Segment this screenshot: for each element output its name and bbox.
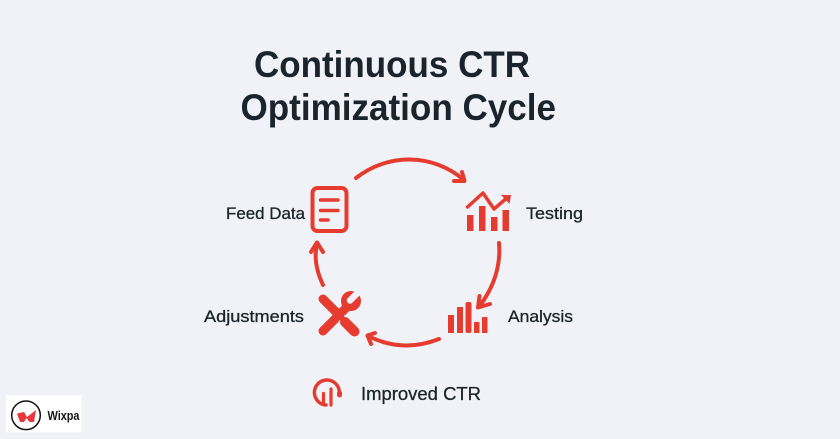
- logo: wixpa: [6, 395, 82, 432]
- label: analysis: Analysis: [508, 307, 573, 326]
- icon: wixpa mark: [12, 401, 40, 430]
- icon: document: [312, 188, 346, 231]
- step: adjustments: [204, 290, 361, 332]
- icon: crossed tools: [323, 290, 361, 332]
- label: improved ctr: Improved CTR: [361, 384, 481, 404]
- label: adjustments: Adjustments: [204, 307, 304, 326]
- step: testing: [467, 193, 583, 231]
- title: [240, 43, 556, 128]
- step: feed data: [226, 188, 346, 231]
- label: testing: Testing: [526, 204, 583, 223]
- arrow: feed data to testing: [356, 159, 464, 181]
- arrow: adjustments to feed data: [311, 242, 323, 285]
- result: improved ctr: [314, 380, 481, 405]
- title: Continuous CTR: [254, 43, 530, 85]
- arrow: testing to analysis: [478, 243, 499, 308]
- label: feed data: Feed Data: [226, 204, 306, 223]
- arrow: analysis to adjustments: [368, 333, 439, 345]
- text: wixpa: Wixpa: [48, 409, 80, 423]
- icon: bar chart: [448, 302, 488, 333]
- icon: circular gauge: [314, 380, 342, 405]
- title: Optimization Cycle: [240, 86, 556, 128]
- icon: chart with trend arrow: [467, 193, 511, 231]
- step: analysis: [448, 302, 573, 333]
